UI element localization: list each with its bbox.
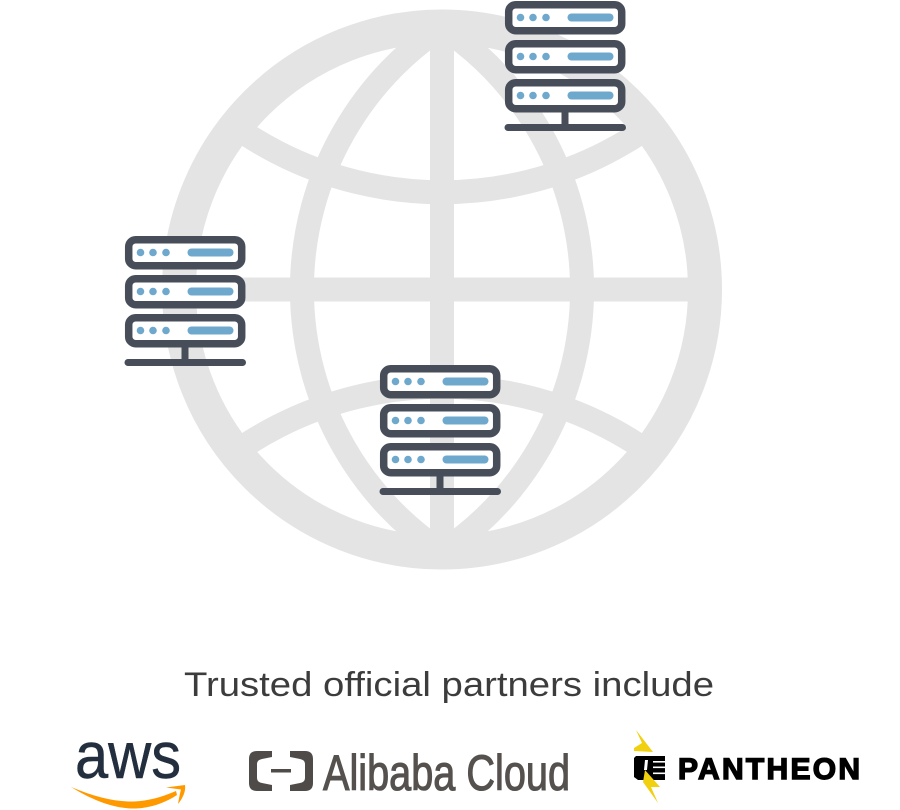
logo: Pantheon: PANTHEON (678, 753, 860, 786)
globe (160, 26, 724, 552)
logo: Alibaba Cloud (249, 745, 570, 801)
server icon: top right (504, 5, 626, 131)
logo: AWS: aws (75, 718, 181, 792)
server icon: left (124, 240, 246, 366)
heading: trusted partners: Trusted official partners include (184, 666, 714, 704)
logo: Pantheon (634, 730, 860, 803)
logo: Alibaba Cloud: Alibaba Cloud (323, 745, 570, 801)
server icon: bottom centre (380, 369, 501, 495)
